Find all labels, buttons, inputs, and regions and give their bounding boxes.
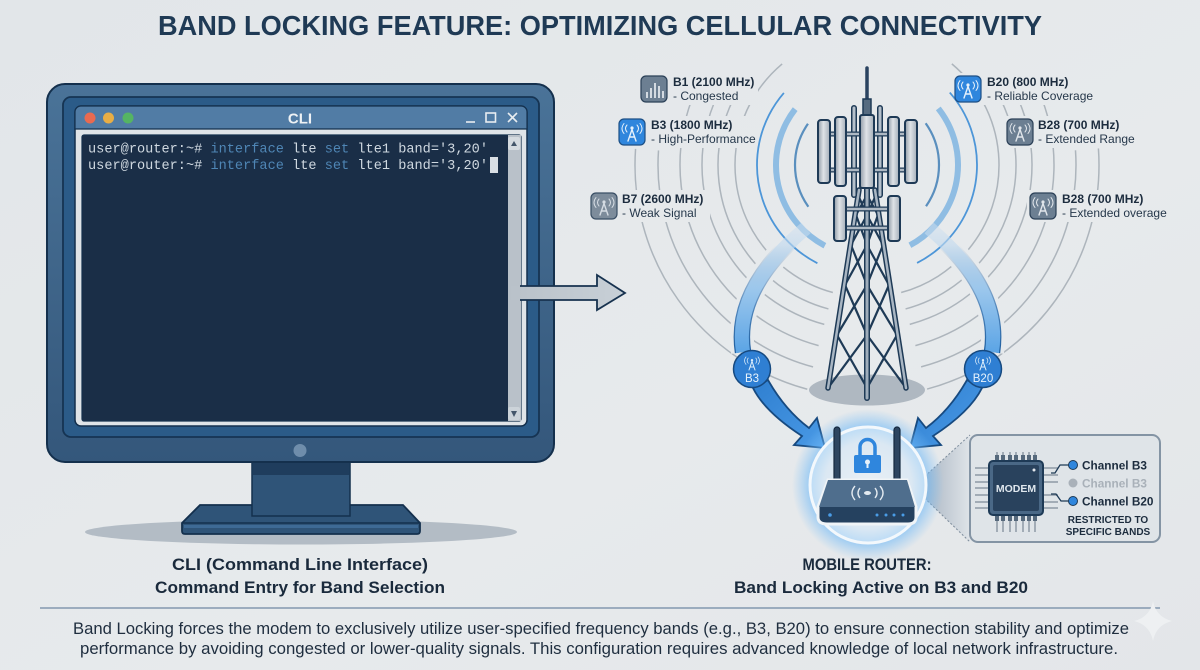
channel B20 active <box>1051 494 1154 508</box>
description: Band Locking forces the modem to exclusively utilize user-specified frequency bands (e.g., B3, B20) to ensure connection stability and optimize <box>73 620 1129 638</box>
caption: router <box>734 555 1028 597</box>
band label: B20: B20 (800 MHz) <box>987 75 1068 89</box>
band label: B28 extended overage <box>1030 192 1167 220</box>
band label: B3 <box>619 118 756 146</box>
badge: B20 <box>964 350 1002 388</box>
band label: B20 <box>955 75 1093 103</box>
tower legs <box>828 188 906 398</box>
router glow <box>792 409 944 561</box>
channel B3 inactive: Channel B3 <box>1082 476 1147 490</box>
modem chip: MODEM <box>996 483 1036 495</box>
CLI window <box>75 106 527 426</box>
tower base shadow <box>809 374 925 406</box>
band label: B28 extended overage: - Extended overage <box>1062 206 1167 220</box>
signal curve: B20 to tower <box>929 228 993 352</box>
modem panel <box>970 435 1160 542</box>
lattice <box>828 195 906 388</box>
arrow: CLI to router <box>508 275 625 310</box>
signal arcs <box>634 63 1100 390</box>
band label: B28 extended range: B28 (700 MHz) <box>1038 118 1119 132</box>
channel B20 active: Channel B20 <box>1082 494 1154 508</box>
router <box>792 409 944 561</box>
band label: B28 extended range <box>1007 118 1135 146</box>
band label: B28 extended overage: B28 (700 MHz) <box>1062 192 1143 206</box>
monitor stand <box>182 460 420 534</box>
arrow: B20 to router <box>910 380 982 448</box>
scrollbar <box>508 135 521 421</box>
command line 2: user@router:~# interface lte set lte1 band='3,20' <box>88 159 488 174</box>
blue signal arcs <box>712 10 1022 320</box>
monitor <box>47 84 554 544</box>
antenna panels <box>818 115 917 241</box>
command line 1: user@router:~# interface lte set lte1 band='3,20' <box>88 142 488 158</box>
mounting arms <box>826 134 908 228</box>
router body <box>818 480 916 524</box>
band label: B7: B7 (2600 MHz) <box>622 192 703 206</box>
arrow: B3 to router <box>753 380 825 448</box>
lock icon <box>854 440 881 473</box>
title bar <box>75 106 527 129</box>
channel B3 active <box>1051 458 1147 473</box>
badge: B3: B3 <box>745 373 759 385</box>
power button <box>294 444 306 457</box>
badge: B20: B20 <box>973 373 993 385</box>
caption: CLI: Command Entry for Band Selection <box>155 578 445 597</box>
channel B3 active: Channel B3 <box>1082 458 1147 472</box>
router antennas <box>834 427 900 482</box>
band label: B7 <box>591 192 703 220</box>
restricted note <box>1066 515 1151 538</box>
cursor <box>490 157 498 173</box>
band label: B3: B3 (1800 MHz) <box>651 118 732 132</box>
window controls <box>466 113 517 122</box>
band label: B3: - High-Performance <box>651 132 756 146</box>
cell tower <box>818 68 917 398</box>
zoom cone <box>913 435 970 542</box>
band label: B20: - Reliable Coverage <box>987 89 1093 103</box>
monitor frame <box>47 84 554 462</box>
terminal screen <box>82 135 521 421</box>
band label: B1: - Congested <box>673 89 738 103</box>
window title: CLI <box>288 110 312 128</box>
caption: CLI <box>155 555 445 597</box>
caption: router: Band Locking Active on B3 and B20 <box>734 578 1028 597</box>
caption: router: MOBILE ROUTER: <box>802 555 932 574</box>
monitor shadow <box>85 520 517 544</box>
description <box>73 620 1129 658</box>
band label: B1: B1 (2100 MHz) <box>673 75 754 89</box>
window buttons <box>84 112 134 124</box>
description: performance by avoiding congested or lower-quality signals. This configuration requires advanced knowledge of local network infrastructure. <box>80 640 1118 658</box>
band label: B7: - Weak Signal <box>622 206 696 220</box>
badge: B3 <box>734 350 770 388</box>
signal curve: B3 to tower <box>742 228 806 352</box>
band label: B1 <box>641 75 754 103</box>
restricted note: RESTRICTED TO <box>1068 515 1148 526</box>
band label: B28 extended range: - Extended Range <box>1038 132 1135 146</box>
caption: CLI: CLI (Command Line Interface) <box>172 555 428 574</box>
sparkle <box>1134 601 1172 641</box>
restricted note: SPECIFIC BANDS <box>1066 527 1151 538</box>
title: BAND LOCKING FEATURE: OPTIMIZING CELLULAR CONNECTIVITY <box>158 10 1042 41</box>
antenna mast <box>854 68 880 195</box>
modem chip <box>975 452 1058 532</box>
